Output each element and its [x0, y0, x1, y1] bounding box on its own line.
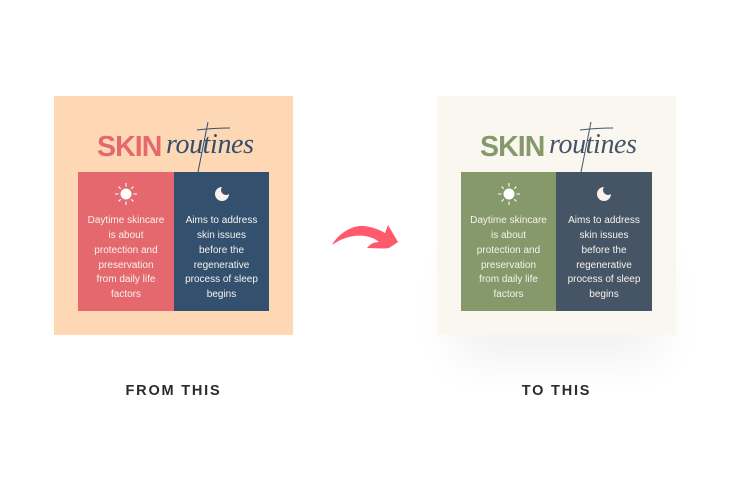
panel: daytime	[461, 172, 556, 311]
arrow	[332, 225, 398, 248]
text: nighttime description: skin issues	[580, 230, 628, 241]
icon: sun	[115, 183, 137, 205]
text: daytime description: is about	[108, 230, 144, 241]
heading: routines script: routines	[166, 129, 254, 160]
panel: nighttime	[556, 172, 652, 311]
text: daytime description	[88, 215, 164, 300]
text: nighttime description: skin issues	[197, 230, 246, 241]
text: daytime description: from daily life	[97, 274, 155, 285]
text: nighttime description: before the	[581, 245, 627, 256]
shadow: right card	[462, 250, 652, 335]
icon: moon	[597, 187, 611, 201]
icon: sun	[498, 183, 520, 205]
panel: to this card	[437, 96, 676, 335]
text: nighttime description: process of sleep	[568, 274, 640, 285]
text: nighttime description: begins	[207, 289, 236, 300]
text: nighttime description: regenerative	[576, 260, 632, 271]
text: nighttime description	[568, 215, 640, 300]
heading: routines script	[166, 122, 254, 172]
text: daytime description: Daytime skincare	[470, 215, 547, 226]
icon: moon	[215, 187, 229, 201]
heading: routines script: routines	[549, 129, 637, 160]
text: daytime description: is about	[491, 230, 526, 241]
text: daytime description: factors	[493, 289, 524, 300]
text: daytime description: preservation	[481, 260, 536, 271]
text: daytime description: from daily life	[479, 274, 538, 285]
text: nighttime description	[185, 215, 258, 300]
heading: routines script	[549, 122, 637, 172]
panel: nighttime	[174, 172, 269, 311]
text: daytime description	[470, 215, 547, 300]
text: daytime description: factors	[111, 289, 141, 300]
caption: to this: TO THIS	[522, 383, 591, 399]
text: nighttime description: begins	[589, 289, 619, 300]
text: nighttime description: before the	[199, 245, 244, 256]
text: daytime description: protection and	[477, 245, 540, 256]
text: nighttime description: Aims to address	[568, 215, 640, 226]
text: daytime description: protection and	[94, 245, 158, 256]
text: daytime description: preservation	[98, 260, 154, 271]
panel: from this card	[54, 96, 293, 335]
heading: SKIN: SKIN	[480, 131, 544, 163]
text: daytime description: Daytime skincare	[88, 215, 164, 226]
caption: from this: FROM THIS	[126, 383, 221, 399]
panel: daytime	[78, 172, 174, 311]
heading: SKIN: SKIN	[97, 131, 162, 163]
text: nighttime description: Aims to address	[186, 215, 257, 226]
text: nighttime description: regenerative	[194, 260, 249, 271]
text: nighttime description: process of sleep	[185, 274, 258, 285]
